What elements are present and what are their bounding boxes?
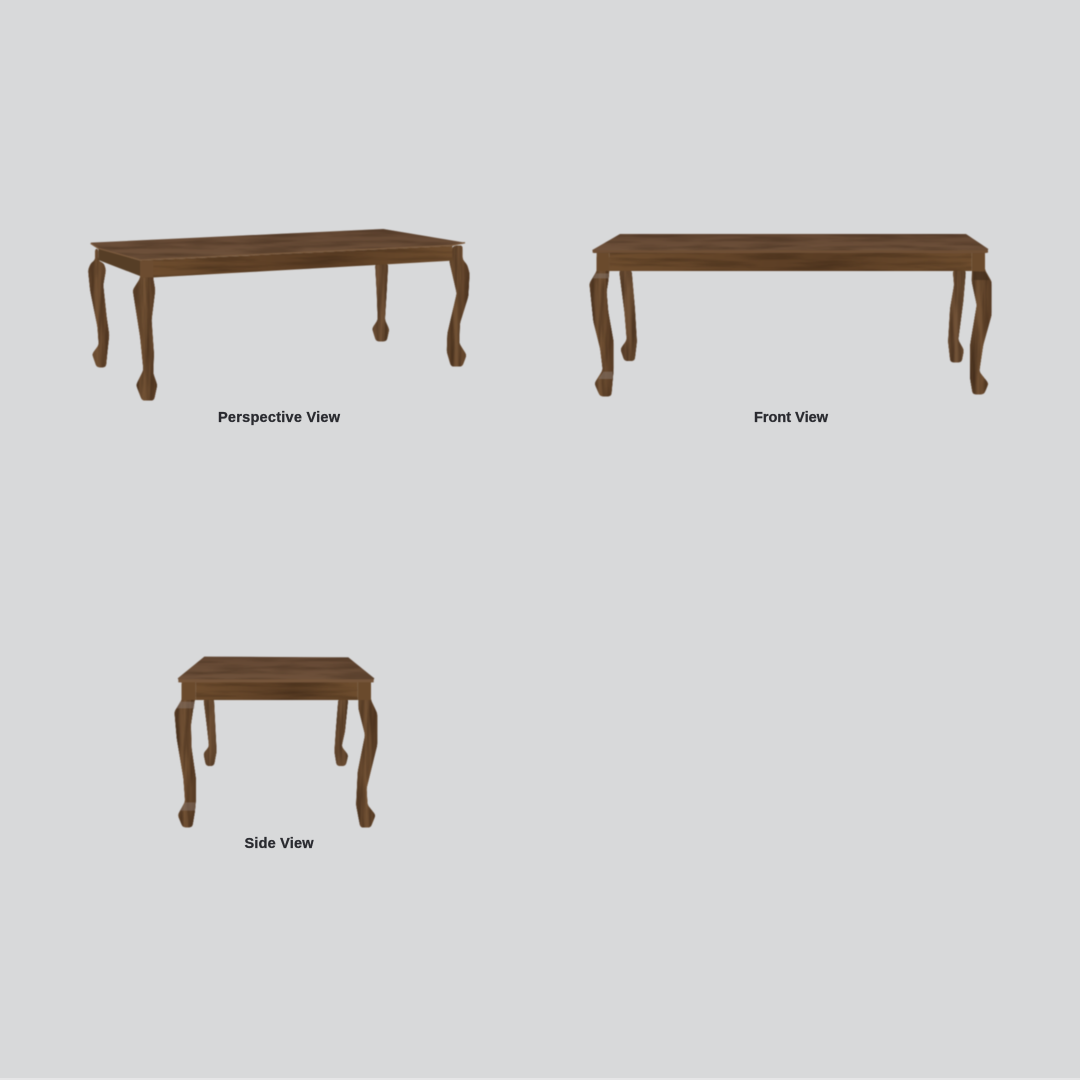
back right leg xyxy=(948,270,966,362)
corner blocks xyxy=(597,253,985,271)
panel: side view xyxy=(174,657,377,852)
top edge xyxy=(178,679,374,682)
leg highlights xyxy=(593,273,613,379)
corner block xyxy=(140,261,153,277)
apron and top xyxy=(91,229,465,277)
legs xyxy=(589,254,992,396)
corner blocks xyxy=(182,682,371,700)
table top xyxy=(91,229,465,261)
front left leg xyxy=(174,681,196,827)
top edge xyxy=(91,243,465,260)
front table illustration xyxy=(589,234,992,396)
front right leg xyxy=(970,254,992,394)
leg highlights xyxy=(177,702,195,811)
side table illustration xyxy=(174,657,377,828)
perspective table illustration xyxy=(88,229,470,401)
label: perspective view: Perspective View xyxy=(218,410,341,426)
back left leg xyxy=(203,698,217,766)
panel: perspective view xyxy=(88,229,470,426)
left apron xyxy=(98,248,140,276)
label: side view: Side View xyxy=(244,836,314,852)
panel: front view xyxy=(589,234,992,426)
apron xyxy=(196,680,358,700)
top edge xyxy=(593,250,988,253)
front left leg xyxy=(133,262,157,401)
back left leg xyxy=(619,270,637,361)
front right leg xyxy=(447,245,470,367)
apron xyxy=(609,252,972,271)
table top xyxy=(592,234,988,253)
back right leg xyxy=(334,698,348,766)
front left leg xyxy=(589,254,614,396)
apron and top xyxy=(592,234,988,271)
back right leg xyxy=(372,263,389,341)
front apron xyxy=(140,246,452,277)
front right leg xyxy=(356,681,377,828)
apron and top xyxy=(178,657,374,700)
legs xyxy=(174,681,377,828)
label: front view: Front View xyxy=(754,410,829,426)
legs xyxy=(88,245,470,401)
back left leg xyxy=(88,247,109,367)
table top xyxy=(178,657,374,682)
